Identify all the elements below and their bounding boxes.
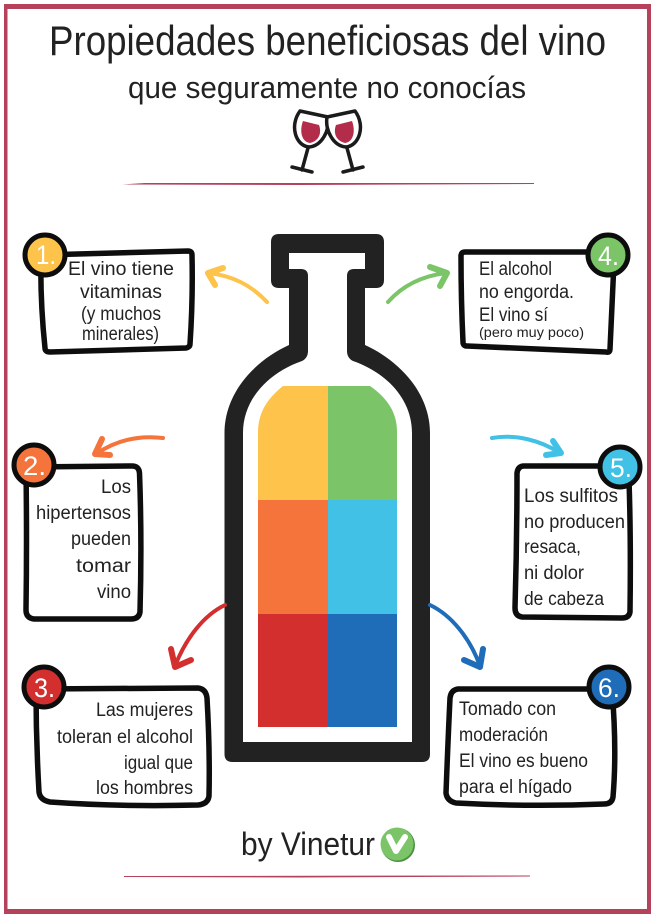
icon: Vinetur logo: [380, 828, 415, 862]
panel 6: [446, 667, 629, 805]
arrow 5 blue: [492, 437, 561, 455]
panel 3: [24, 667, 209, 806]
panel 4: El alcohol: [479, 259, 552, 280]
panel 3: Las mujeres: [96, 700, 193, 721]
subtitle: que seguramente no conocías: [128, 70, 526, 105]
arrow 6 blue: [430, 605, 483, 667]
panel 2: vino: [97, 582, 131, 603]
arrow 4 green: [388, 267, 447, 302]
panel 5: [515, 447, 640, 618]
arrow 1 yellow: [208, 268, 267, 302]
panel 1: (y muchos: [81, 304, 161, 325]
panel 6: Tomado con: [459, 699, 556, 720]
panel 1: vitaminas: [80, 282, 162, 303]
panel 5: resaca,: [524, 537, 581, 558]
panel 4: El vino sí: [479, 305, 549, 326]
panel 2: Los: [101, 477, 131, 498]
bottom divider: [124, 876, 530, 878]
panel 1: [25, 235, 192, 352]
panel 3: toleran el alcohol: [57, 727, 193, 748]
panel 5: de cabeza: [524, 589, 604, 610]
bottle: [224, 234, 430, 762]
arrow 2 orange: [95, 437, 163, 455]
panel 2: 2.: [23, 451, 46, 481]
panel 2: tomar: [76, 556, 132, 577]
panel 3: los hombres: [96, 778, 193, 799]
panel 6: 6.: [598, 673, 620, 703]
panel 6: moderación: [459, 725, 548, 746]
panel 1: minerales): [82, 324, 159, 345]
panel 4: 4.: [598, 241, 619, 271]
panel 5: Los sulfitos: [524, 486, 618, 507]
panel 5: 5.: [610, 453, 632, 483]
arrow 3 red: [171, 605, 225, 667]
panel 3: 3.: [34, 673, 55, 703]
panel 6: para el hígado: [459, 777, 572, 798]
panel 2: [14, 445, 141, 619]
panel 1: El vino tiene: [68, 259, 174, 280]
panel 3: igual que: [124, 753, 193, 774]
top divider: [122, 183, 534, 185]
icon: toasting wine glasses: [292, 111, 363, 172]
bottle liquid colours: [258, 386, 397, 727]
panel 1: 1.: [36, 240, 56, 270]
panel 2: hipertensos: [36, 503, 131, 524]
panel 4: [461, 235, 628, 352]
panel 4: no engorda.: [479, 282, 574, 303]
bottle outline: [224, 234, 430, 762]
panel 6: El vino es bueno: [459, 751, 588, 772]
byline: by Vinetur: [241, 826, 375, 862]
panel 2: pueden: [71, 529, 131, 550]
panel 5: no producen: [524, 512, 625, 533]
panel 5: ni dolor: [524, 563, 585, 584]
panel 4: (pero muy poco): [479, 324, 584, 340]
